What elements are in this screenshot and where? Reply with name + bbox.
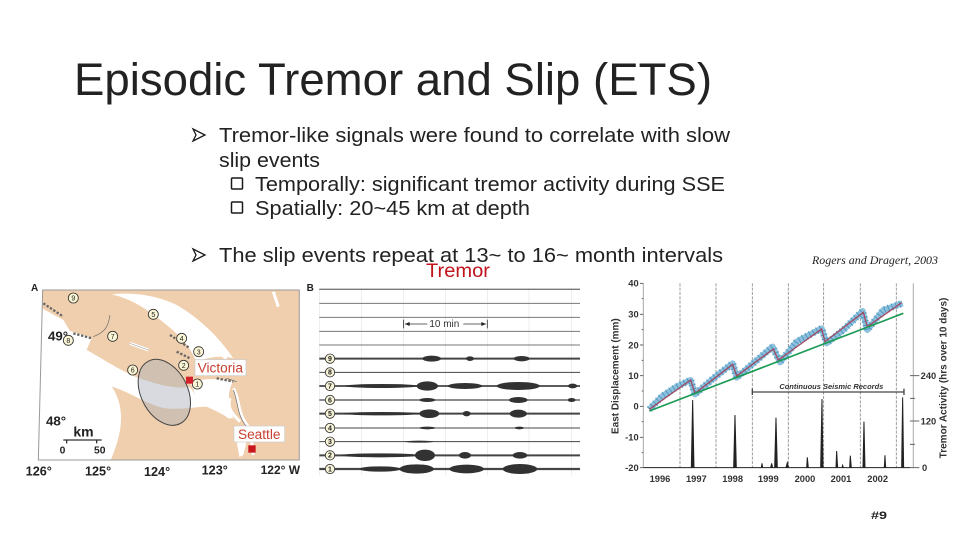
scale bar: 50 <box>94 445 106 456</box>
station numbers: 8 <box>328 370 332 377</box>
tremor activity spikes <box>643 397 910 468</box>
continuous records span: Continuous Seismic Records <box>779 382 883 391</box>
citation: Rogers and Dragert, 2003 <box>811 253 938 267</box>
latitude and longitude labels: 124° <box>144 465 170 479</box>
latitude and longitude labels: 123° <box>202 464 228 478</box>
map panel A <box>26 283 314 479</box>
time scale: 10 min <box>429 319 459 330</box>
left axis labels: -20 <box>625 463 639 473</box>
station numbers: 3 <box>328 439 332 446</box>
bullet: tremor-like signals: Tremor-like signals were found to correlate with slow <box>219 125 731 147</box>
city: seattle: Seattle <box>238 427 281 442</box>
scale bar <box>60 424 106 456</box>
olympic peninsula <box>111 387 240 460</box>
quiet traces <box>319 289 580 345</box>
scale bar: km <box>73 424 94 440</box>
latitude and longitude labels: 122° W <box>261 463 301 477</box>
station numbers: 7 <box>328 383 332 390</box>
tremor label: Tremor <box>426 261 491 282</box>
bullet: slip events repeat: The slip events repeat at 13~ to 16~ month intervals <box>219 245 723 267</box>
left axis labels <box>625 279 639 473</box>
continuous records span <box>752 382 904 395</box>
station numbers: 6 <box>131 368 135 375</box>
page number: #9 <box>871 510 887 522</box>
station numbers: 5 <box>151 312 155 319</box>
station numbers: 2 <box>182 363 186 370</box>
year labels: 1997 <box>686 474 707 484</box>
year labels: 1998 <box>722 474 743 484</box>
year labels: 2000 <box>795 474 815 484</box>
right axis labels: 120 <box>921 416 936 426</box>
station numbers: 6 <box>328 397 332 404</box>
bullet list <box>193 125 731 267</box>
map land <box>38 290 299 460</box>
year labels: 1996 <box>650 474 670 484</box>
left axis labels: -10 <box>625 433 639 443</box>
station numbers: 7 <box>111 334 115 341</box>
station numbers: 4 <box>328 425 332 432</box>
gps data scatter <box>649 303 903 409</box>
station markers <box>63 293 204 389</box>
station numbers <box>66 296 201 389</box>
bullet: tremor-like signals <box>193 125 731 172</box>
left axis labels: 10 <box>628 371 639 381</box>
latitude and longitude labels: 48° <box>46 413 66 428</box>
sub-bullet: temporally: Temporally: significant tremor activity during SSE <box>255 174 725 196</box>
station numbers: 4 <box>180 336 184 343</box>
year labels <box>650 474 888 484</box>
station markers <box>325 354 335 474</box>
latitude and longitude labels: 49° <box>48 328 68 343</box>
station numbers: 5 <box>328 411 332 418</box>
model fit line <box>649 303 902 409</box>
title: Episodic Tremor and Slip (ETS) <box>74 54 712 105</box>
left axis labels: 0 <box>633 402 639 412</box>
seismogram panel B <box>319 288 580 475</box>
station numbers: 1 <box>195 382 199 389</box>
coastal islets <box>43 303 233 382</box>
year labels: 1999 <box>758 474 779 484</box>
latitude and longitude labels <box>26 283 314 479</box>
sub-bullet: spatially: Spatially: 20~45 km at depth <box>255 198 530 220</box>
latitude and longitude labels: 126° <box>26 464 52 478</box>
displacement and tremor chart <box>611 279 950 484</box>
left axis labels: 20 <box>628 340 639 350</box>
latitude and longitude labels: 125° <box>85 464 111 478</box>
station numbers: 1 <box>328 466 332 473</box>
left axis labels: 40 <box>628 279 639 289</box>
bullet: tremor-like signals: slip events <box>219 150 320 172</box>
map frame <box>38 290 299 460</box>
left axis title: East Displacement (mm) <box>611 318 622 434</box>
latitude and longitude labels: A <box>31 283 38 294</box>
tremor source ellipse <box>128 351 201 434</box>
station numbers: 9 <box>71 296 75 303</box>
year labels: 2001 <box>831 474 851 484</box>
city: victoria <box>186 360 246 384</box>
left axis labels: 30 <box>628 310 639 320</box>
station numbers: 9 <box>328 356 332 363</box>
station numbers: 8 <box>66 338 70 345</box>
map water <box>38 308 247 460</box>
year labels: 2002 <box>867 474 888 484</box>
event lines <box>680 283 896 468</box>
time scale <box>404 319 487 330</box>
city: seattle <box>234 426 285 453</box>
station traces <box>319 359 580 469</box>
grid lines <box>319 288 572 475</box>
station numbers: 2 <box>328 453 332 460</box>
right axis labels <box>921 371 936 473</box>
station numbers <box>328 356 332 473</box>
latitude and longitude labels: B <box>307 283 314 294</box>
tremor bursts <box>342 356 577 474</box>
scale bar: 0 <box>60 445 66 456</box>
secular trend line <box>649 313 903 411</box>
city: victoria: Victoria <box>198 361 243 376</box>
axes <box>643 283 913 468</box>
station numbers: 3 <box>197 349 201 356</box>
puget sound inlets <box>193 292 278 455</box>
right axis labels: 0 <box>922 463 927 473</box>
right axis labels: 240 <box>921 371 936 381</box>
right axis title: Tremor Activity (hrs over 10 days) <box>939 298 950 458</box>
